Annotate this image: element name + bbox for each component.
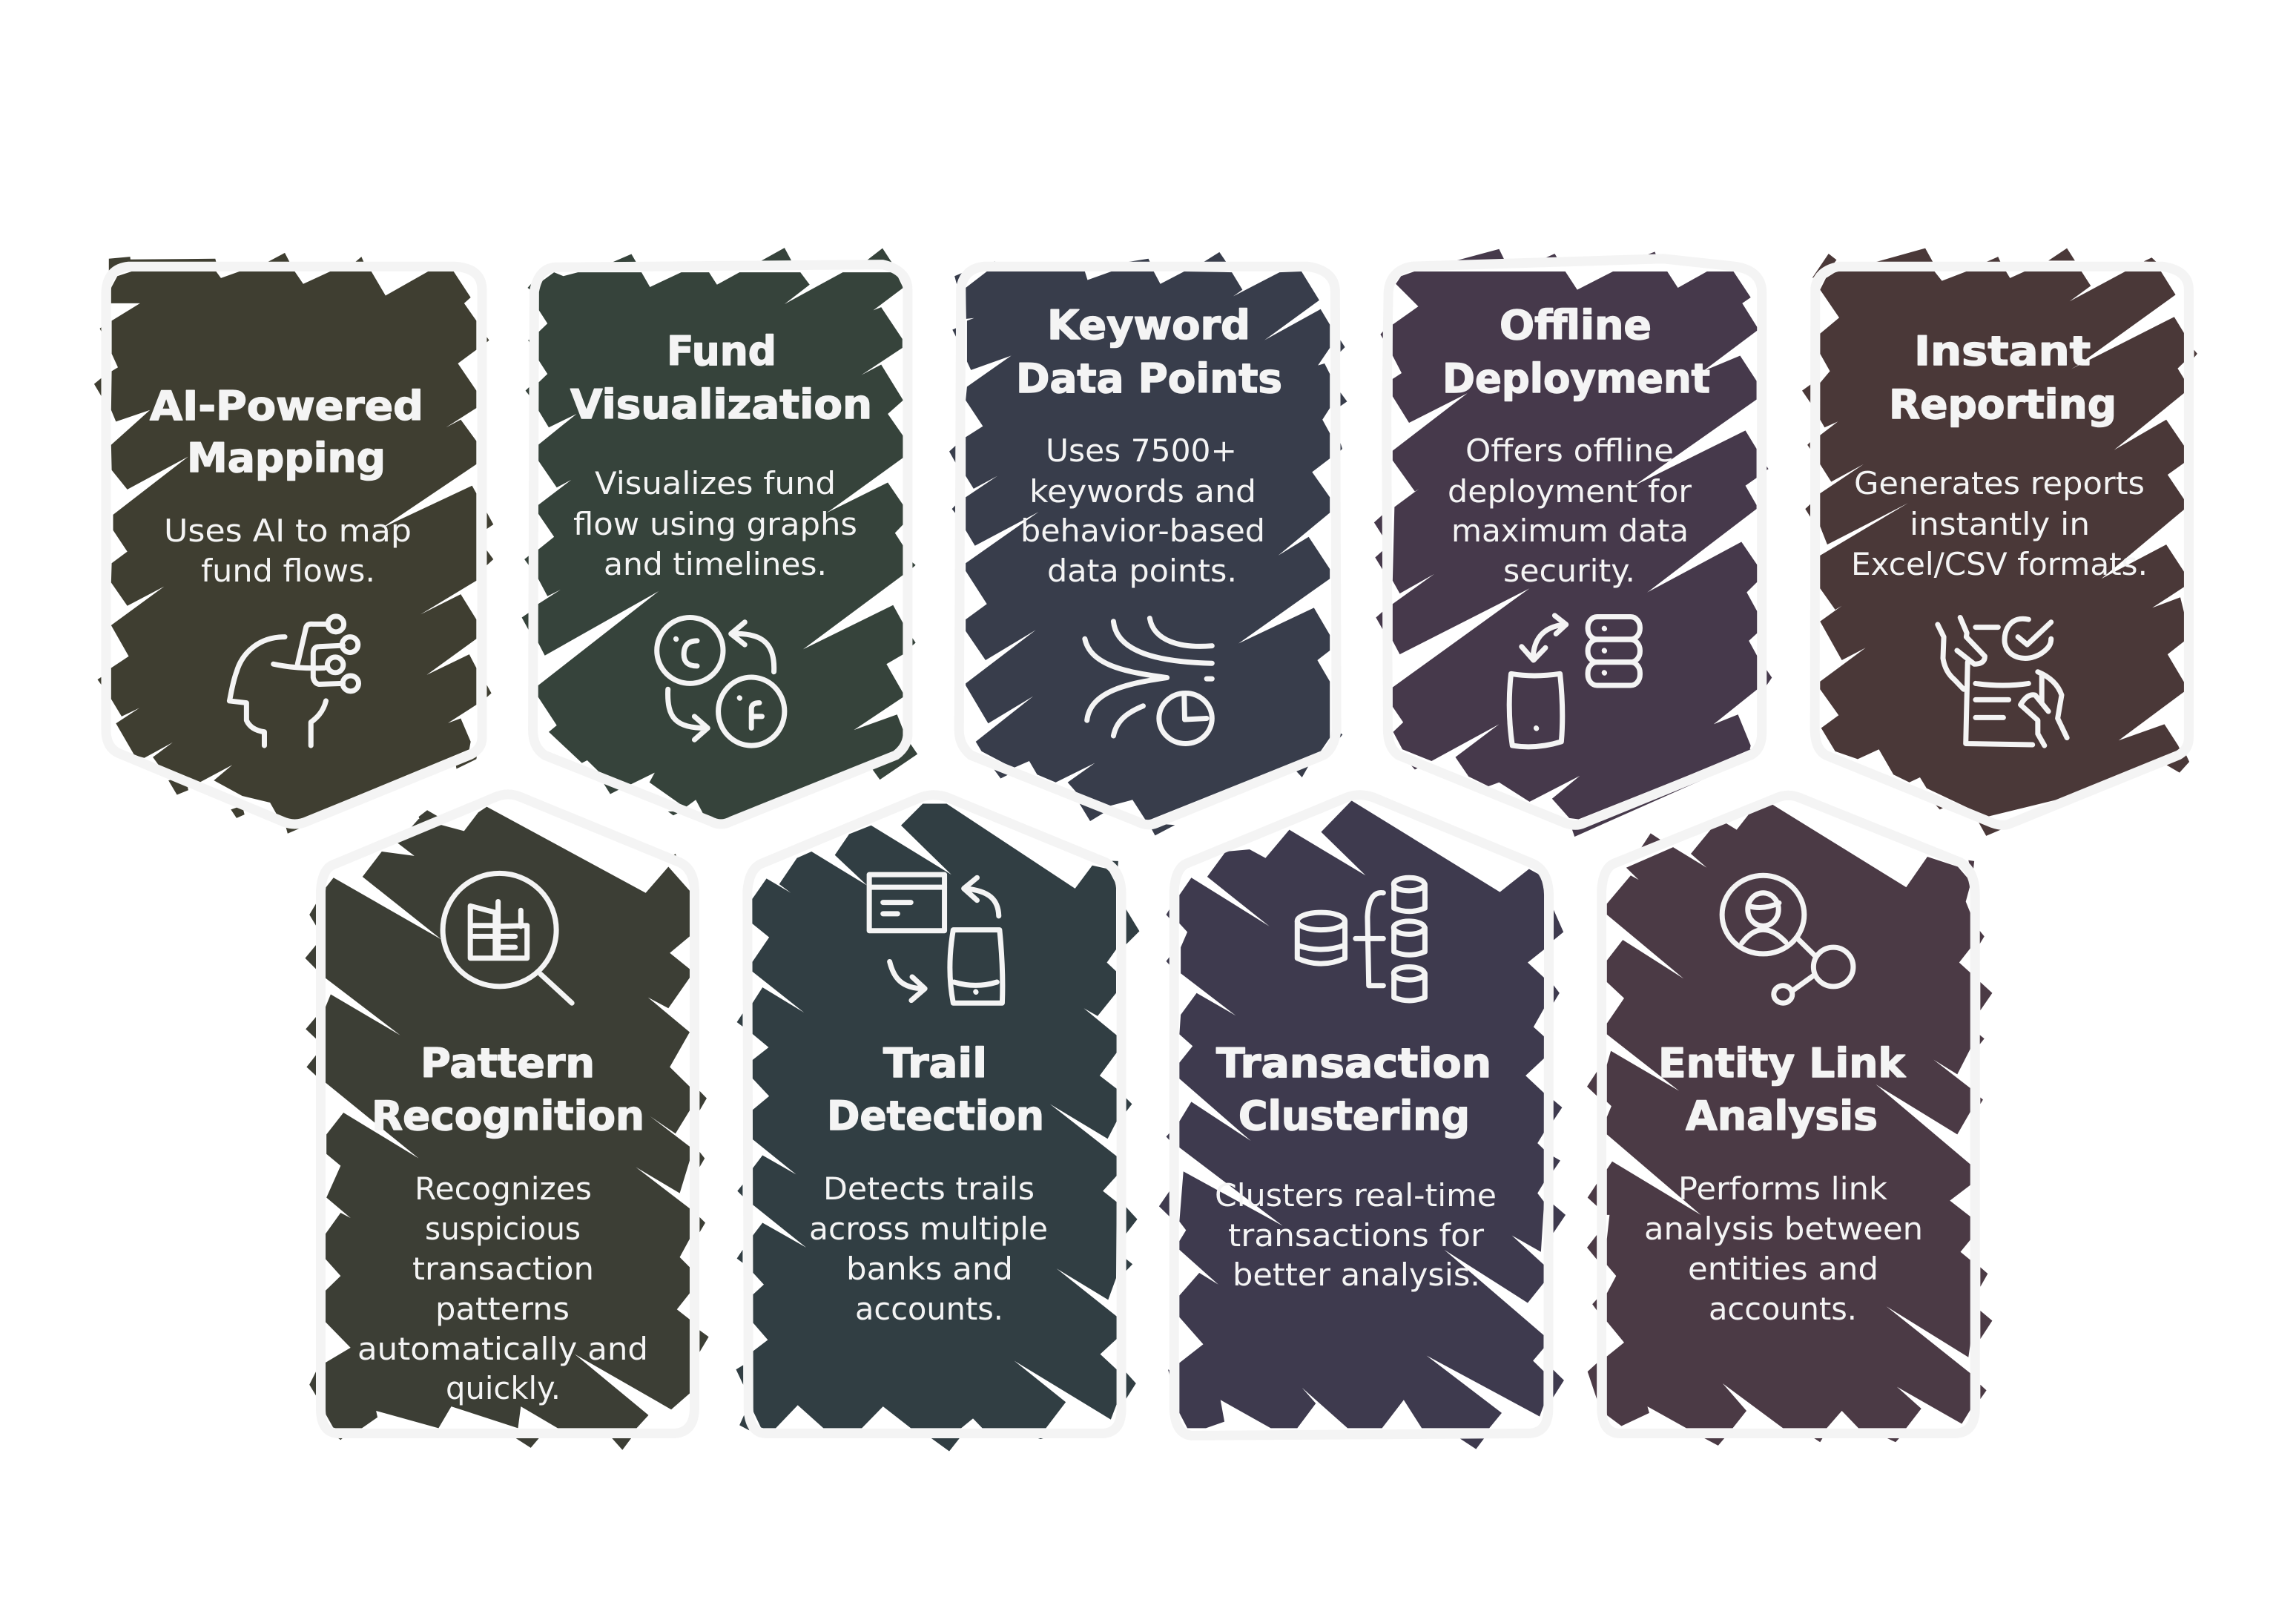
title: Instant Reporting: Instant [1914, 328, 2091, 375]
body: Entity Link Analysis: accounts. [1709, 1291, 1857, 1327]
icon: user node network [1722, 875, 1853, 1003]
icon: temperature conversion circles [657, 618, 785, 745]
outline: Offline Deployment [1387, 259, 1762, 825]
icon: window and tablet exchange [869, 875, 1003, 1003]
scribble fill: Transaction Clustering [1159, 800, 1566, 1449]
icon: magnifier over document [443, 873, 572, 1003]
title: AI-Powered Mapping: AI-Powered [150, 383, 423, 429]
title: Entity Link Analysis: Analysis [1686, 1093, 1878, 1139]
outline: Trail Detection [748, 795, 1121, 1433]
body: Trail Detection: accounts. [855, 1291, 1003, 1327]
title: Trail Detection: Trail [883, 1040, 987, 1087]
body: Pattern Recognition: patterns [435, 1291, 570, 1327]
panel: Fund Visualization [522, 248, 917, 824]
panel: Instant Reporting [1802, 248, 2197, 836]
panel: Entity Link Analysis [1587, 795, 1992, 1446]
outline: Instant Reporting [1815, 266, 2188, 825]
body: AI-Powered Mapping: fund flows. [201, 553, 375, 589]
title: Offline Deployment: Offline [1500, 302, 1652, 349]
title: AI-Powered Mapping: Mapping [187, 435, 386, 481]
body: Fund Visualization: Visualizes fund [595, 465, 836, 501]
scribble fill: Trail Detection [736, 803, 1139, 1452]
body: Offline Deployment: deployment for [1448, 473, 1692, 510]
body: Trail Detection: banks and [846, 1251, 1013, 1287]
panel: Transaction Clustering [1159, 795, 1566, 1449]
body: Pattern Recognition: transaction [412, 1251, 594, 1287]
scribble fill: Offline Deployment [1374, 249, 1772, 837]
title: Trail Detection: Detection [827, 1093, 1044, 1139]
body: Entity Link Analysis: entities and [1688, 1251, 1878, 1287]
title: Fund Visualization: Visualization [570, 381, 872, 428]
panel: Trail Detection [736, 795, 1139, 1452]
body: Offline Deployment: security. [1503, 553, 1635, 589]
body: Offline Deployment: Offers offline [1465, 432, 1674, 469]
body: Instant Reporting: Generates reports [1854, 465, 2145, 501]
icon: streams converging to pie chart [1085, 619, 1212, 743]
outline: Transaction Clustering [1174, 795, 1549, 1435]
icon: hands holding checklist report [1938, 618, 2067, 745]
panel: Keyword Data Points [949, 252, 1347, 835]
title: Pattern Recognition: Recognition [372, 1093, 644, 1139]
body: Fund Visualization: and timelines. [604, 546, 827, 582]
title: Transaction Clustering: Transaction [1216, 1040, 1491, 1087]
icon: head with circuit nodes [229, 616, 359, 745]
scribble fill: Keyword Data Points [949, 252, 1347, 835]
title: Instant Reporting: Reporting [1889, 381, 2117, 428]
body: Pattern Recognition: automatically and [357, 1331, 648, 1367]
body: Trail Detection: across multiple [809, 1211, 1048, 1247]
outline: Pattern Recognition [321, 794, 694, 1433]
body: Transaction Clustering: transactions for [1228, 1217, 1485, 1254]
panel: Pattern Recognition [305, 794, 709, 1450]
outline: Fund Visualization [533, 265, 908, 824]
body: Pattern Recognition: suspicious [425, 1211, 581, 1247]
scribble fill: AI-Powered Mapping [94, 253, 493, 834]
body: AI-Powered Mapping: Uses AI to map [164, 513, 412, 549]
body: Trail Detection: Detects trails [823, 1170, 1035, 1207]
scribble fill: Instant Reporting [1802, 248, 2197, 836]
body: Keyword Data Points: data points. [1047, 553, 1237, 589]
title: Transaction Clustering: Clustering [1238, 1093, 1470, 1139]
body: Pattern Recognition: quickly. [446, 1370, 561, 1406]
outline: Entity Link Analysis [1602, 795, 1975, 1433]
body: Entity Link Analysis: analysis between [1644, 1211, 1923, 1247]
title: Keyword Data Points: Keyword [1047, 302, 1250, 349]
body: Offline Deployment: maximum data [1451, 513, 1689, 549]
icon: phone syncing with database [1509, 616, 1640, 747]
outline: Keyword Data Points [959, 266, 1336, 825]
body: Keyword Data Points: Uses 7500+ [1046, 432, 1237, 469]
title: Offline Deployment: Deployment [1442, 355, 1710, 402]
body: Pattern Recognition: Recognizes [415, 1170, 592, 1207]
body: Instant Reporting: Excel/CSV formats. [1851, 546, 2148, 582]
outline: AI-Powered Mapping [106, 266, 482, 824]
scribble fill: Entity Link Analysis [1587, 805, 1992, 1446]
panel: Offline Deployment [1374, 249, 1772, 837]
body: Fund Visualization: flow using graphs [573, 506, 857, 542]
scribble fill: Fund Visualization [522, 248, 917, 819]
title: Pattern Recognition: Pattern [420, 1040, 595, 1087]
body: Transaction Clustering: Clusters real-time [1215, 1177, 1497, 1214]
title: Entity Link Analysis: Entity Link [1658, 1040, 1906, 1087]
body: Transaction Clustering: better analysis. [1233, 1257, 1480, 1293]
title: Fund Visualization: Fund [667, 328, 776, 375]
icon: database cluster tree [1297, 878, 1425, 1001]
body: Instant Reporting: instantly in [1910, 506, 2090, 542]
panel: AI-Powered Mapping [94, 253, 493, 834]
body: Keyword Data Points: behavior-based [1020, 513, 1265, 549]
body: Keyword Data Points: keywords and [1029, 473, 1256, 510]
body: Entity Link Analysis: Performs link [1678, 1170, 1888, 1207]
scribble fill: Pattern Recognition [305, 807, 709, 1450]
title: Keyword Data Points: Data Points [1016, 355, 1282, 402]
